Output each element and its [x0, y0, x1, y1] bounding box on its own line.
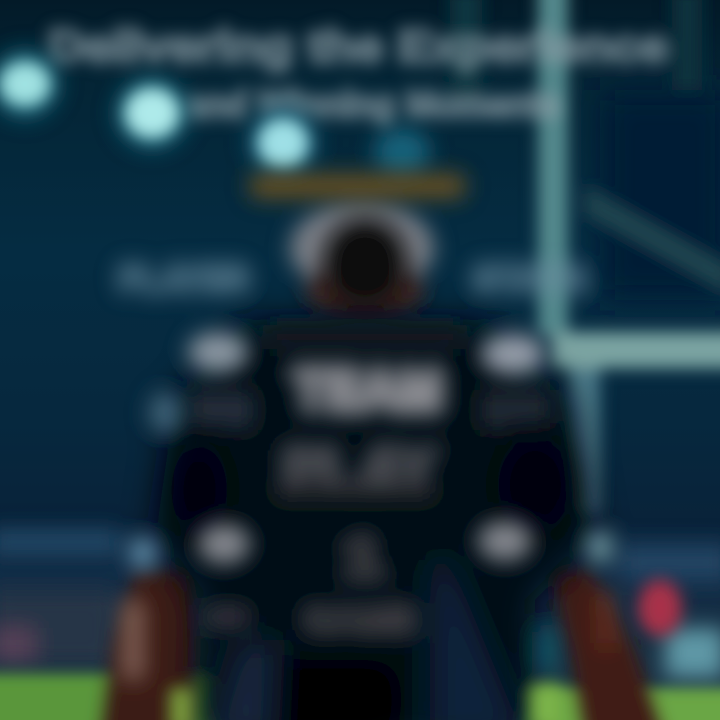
- gold halo banner: [250, 174, 465, 198]
- shoulder highlights: [149, 332, 545, 564]
- wrist bands: [130, 532, 612, 568]
- title: two blurred lines of text: Delivering the Experience: [48, 20, 668, 72]
- jersey text: [275, 358, 443, 643]
- torso: [155, 320, 595, 720]
- grass field: [0, 674, 720, 720]
- arm: right: [550, 570, 665, 720]
- head: dark hair: [323, 218, 407, 306]
- red crowd accent: [638, 580, 682, 636]
- floodlight 3: [249, 108, 317, 176]
- stadium floodlights: [0, 50, 430, 176]
- player: [100, 174, 665, 720]
- arm highlights: [122, 590, 612, 680]
- green field between leg and arm: [170, 684, 562, 720]
- jersey number: 1: [340, 524, 386, 591]
- lower sleeve highlights: [205, 605, 250, 629]
- pads and collar: [190, 325, 550, 430]
- neck and skin: [305, 266, 425, 318]
- crowd band: [0, 530, 720, 678]
- floodlight 1: [0, 50, 59, 118]
- jersey line 1: TEAM: [293, 358, 443, 423]
- jersey line 2: PLAY: [282, 436, 437, 501]
- floodlight 2: [116, 77, 188, 149]
- title: two blurred lines of text: [48, 20, 668, 126]
- arm: left: [100, 570, 195, 720]
- sleeve blacks and trouser panels: [172, 435, 573, 720]
- head glow / helmet outer: [290, 202, 434, 294]
- title: two blurred lines of text: and Winning Moments: [185, 84, 560, 126]
- goalposts: [450, 0, 720, 515]
- right side dark haze: [600, 90, 720, 300]
- side labels beside the player: PLAYER: [118, 259, 250, 301]
- floodlight 4 (dim): [374, 128, 430, 176]
- side labels beside the player: [118, 259, 587, 301]
- side labels beside the player: STATS: [472, 259, 587, 301]
- jersey line 3: NAME: [303, 596, 418, 643]
- jersey panel under line 2: [275, 482, 435, 500]
